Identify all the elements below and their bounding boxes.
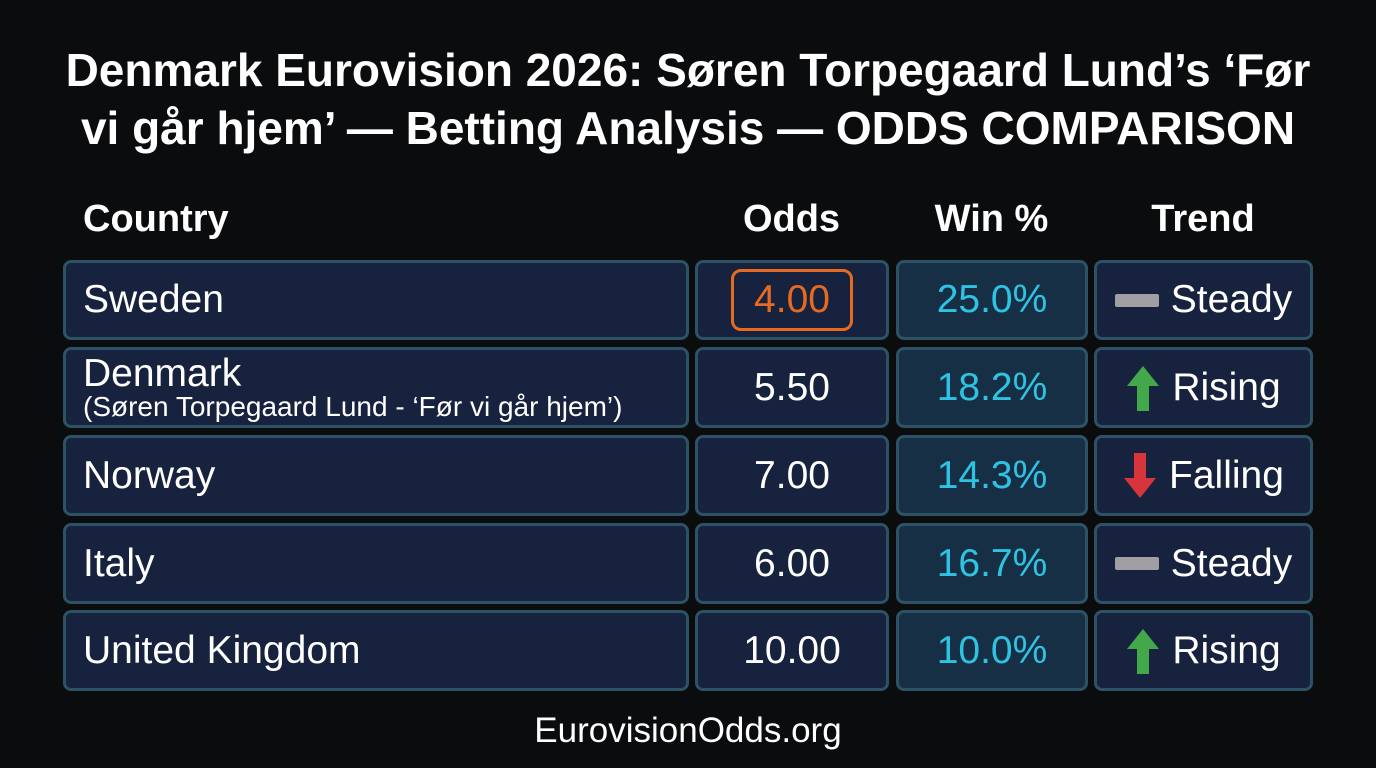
row: Denmark: Rising bbox=[1172, 366, 1281, 408]
header: country: Country bbox=[83, 198, 229, 240]
row: Norway bbox=[63, 435, 1313, 516]
title bbox=[66, 44, 1310, 154]
header: trend: Trend bbox=[1151, 198, 1255, 240]
row: Norway: 14.3% bbox=[937, 454, 1047, 496]
row: Italy: 6.00 bbox=[754, 542, 830, 584]
row: Denmark: 5.50 bbox=[754, 366, 830, 408]
row: UK: 10.0% bbox=[937, 628, 1047, 672]
row: Norway: 7.00 bbox=[754, 454, 830, 496]
row: UK: United Kingdom bbox=[83, 628, 360, 672]
row: Sweden: Steady bbox=[1171, 278, 1292, 321]
row: Norway: Norway bbox=[83, 454, 215, 496]
row: UK bbox=[63, 610, 1313, 691]
row: Sweden: 25.0% bbox=[937, 278, 1047, 321]
row: Italy: Steady bbox=[1171, 542, 1292, 584]
row: Sweden bbox=[63, 260, 1313, 340]
row: Italy bbox=[63, 523, 1313, 604]
row: UK: 10.00 bbox=[743, 628, 841, 672]
title: vi går hjem’ — Betting Analysis — ODDS COMPARISON bbox=[81, 102, 1295, 154]
row: Sweden: Sweden bbox=[83, 278, 224, 321]
row: UK: Rising bbox=[1172, 628, 1281, 672]
row: Denmark: Denmark bbox=[83, 352, 241, 395]
footer: EurovisionOdds.org bbox=[534, 711, 842, 750]
header: odds: Odds bbox=[743, 198, 840, 240]
row: Denmark: (Søren Torpegaard Lund - ‘Før vi går hjem’) bbox=[83, 391, 622, 422]
header: win: Win % bbox=[935, 198, 1048, 240]
row: Italy: Italy bbox=[83, 542, 155, 584]
row: Sweden: 4.00 bbox=[754, 278, 830, 321]
row: Norway: Falling bbox=[1169, 454, 1284, 496]
row: Italy: 16.7% bbox=[937, 542, 1047, 584]
row: Denmark: 18.2% bbox=[937, 366, 1047, 408]
row: Denmark bbox=[63, 347, 1313, 428]
title: Denmark Eurovision 2026: Søren Torpegaard Lund’s ‘Før bbox=[66, 44, 1310, 96]
